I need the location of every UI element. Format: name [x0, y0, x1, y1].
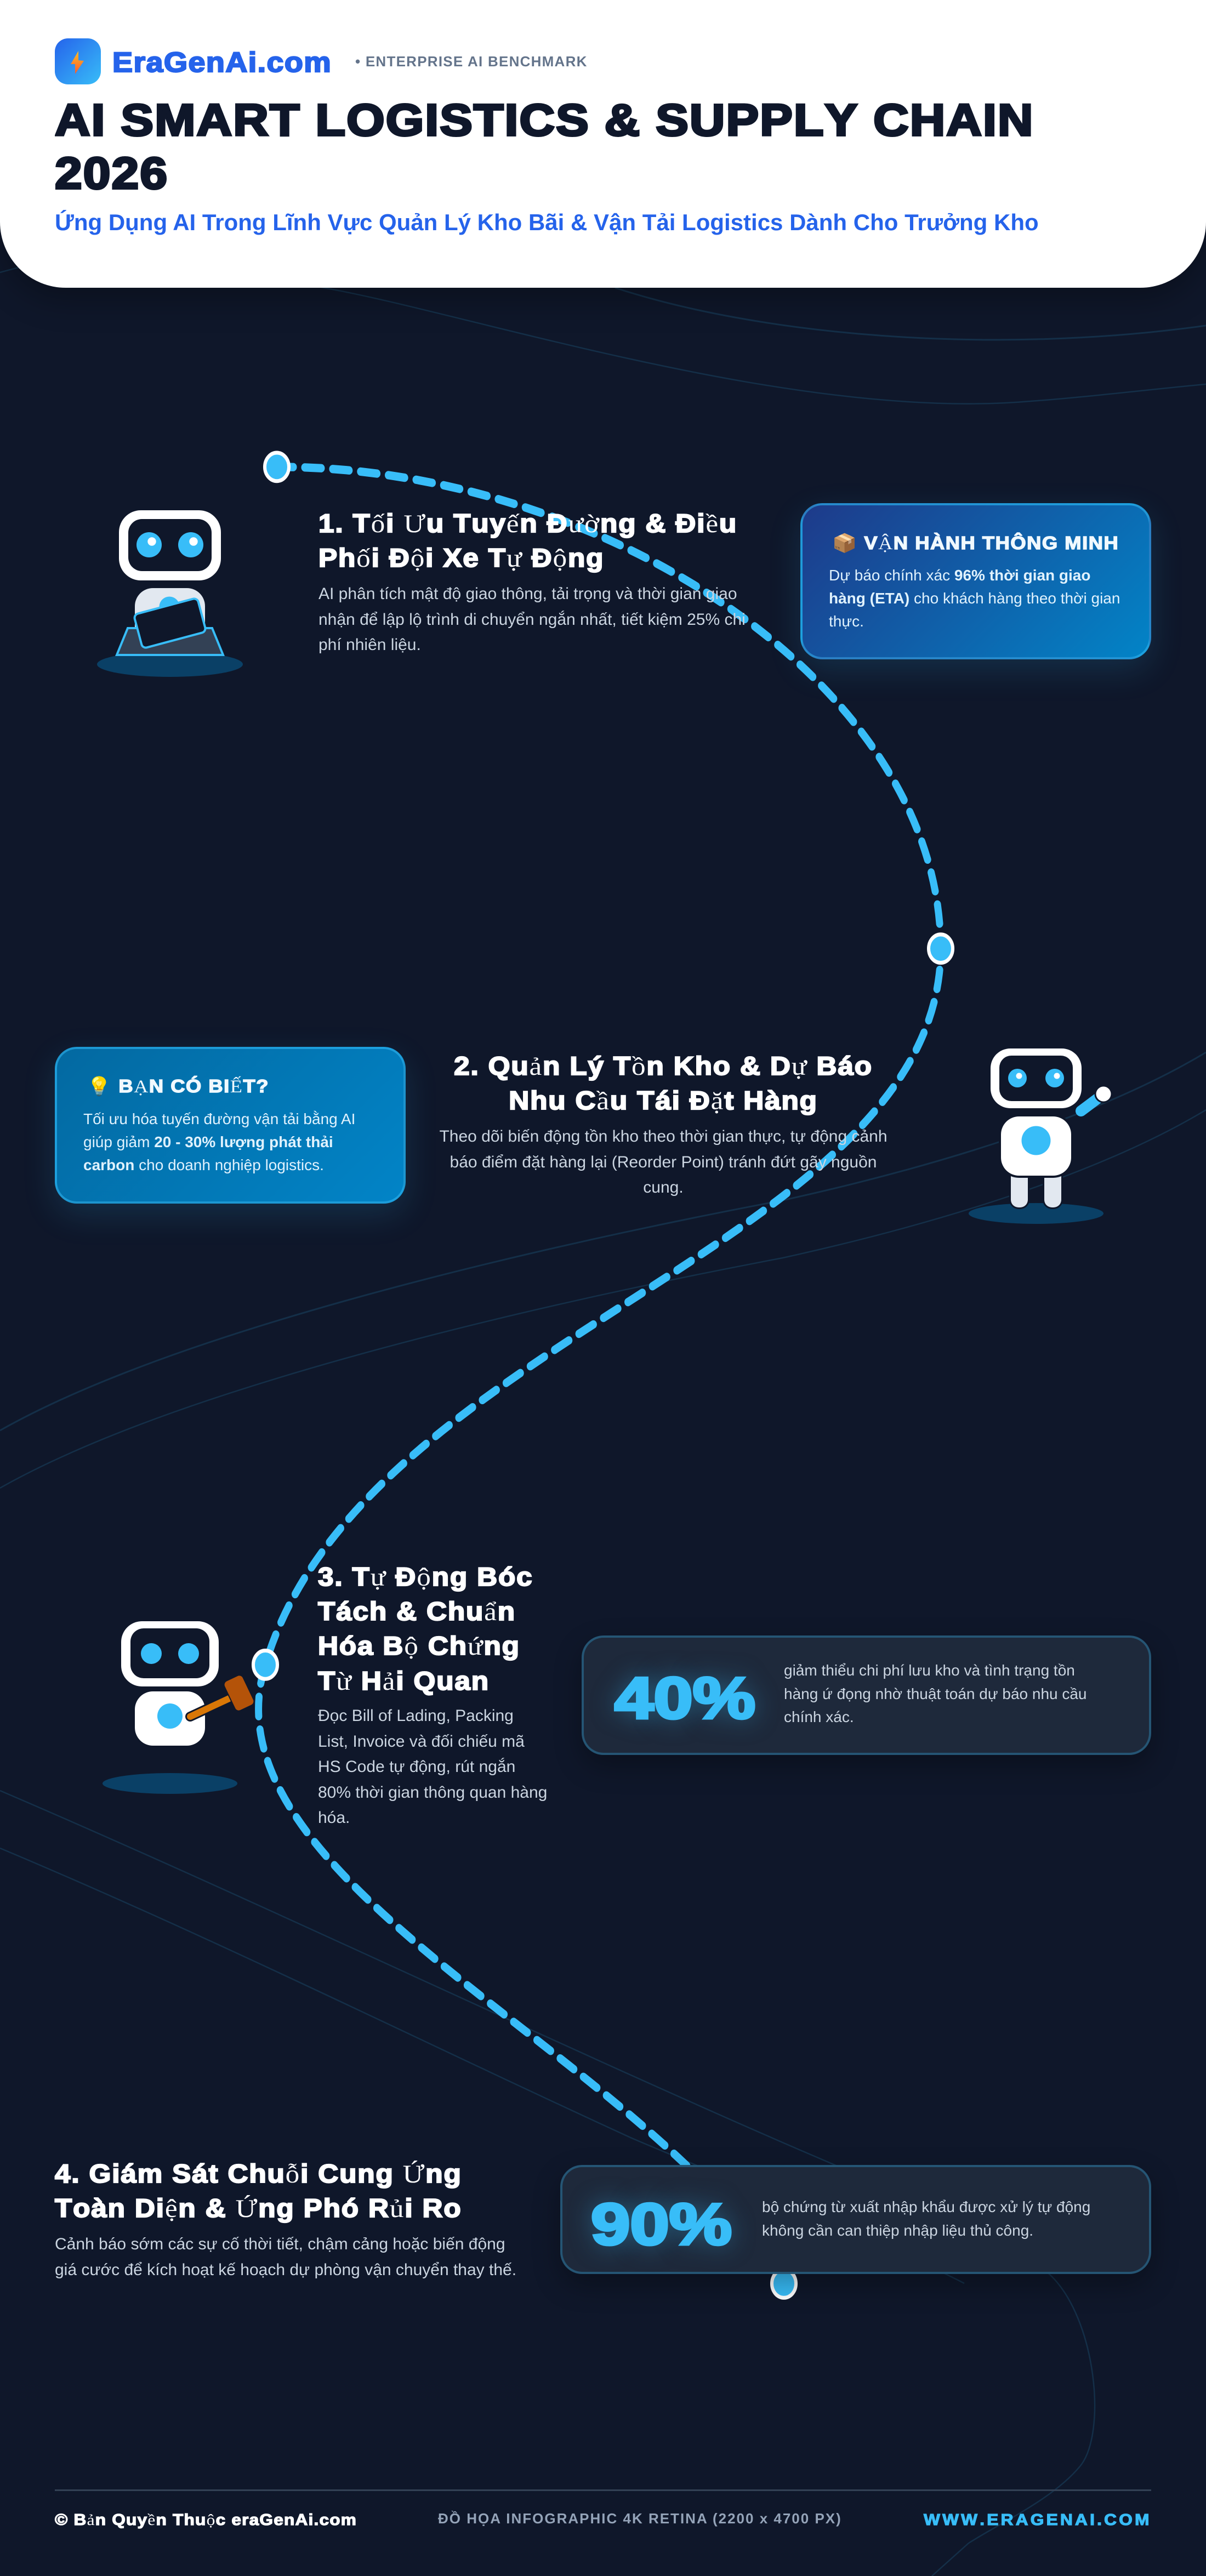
step 3 heading: Hóa Bộ Chứng — [318, 1631, 520, 1661]
step 3 text — [318, 1707, 547, 1827]
callout body: carbon cho doanh nghiệp logistics. — [83, 1156, 324, 1173]
callout body: Dự báo chính xác 96% thời gian giao — [829, 567, 1090, 584]
stat description: không cần can thiệp nhập liệu thủ công. — [762, 2222, 1033, 2238]
subtitle: Ứng Dụng AI Trong Lĩnh Vực Quản Lý Kho Bãi & Vận Tải Logistics Dành Cho Trưởng Kho — [55, 209, 1039, 235]
stat card: 90% — [560, 2165, 1151, 2274]
step 4 heading — [54, 2158, 462, 2223]
main title — [55, 95, 1034, 198]
step 1 text: phí nhiên liệu. — [318, 636, 421, 654]
step 3 text: Đọc Bill of Lading, Packing — [318, 1707, 514, 1725]
callout: smart operations — [800, 503, 1151, 659]
stat number: 90% — [591, 2191, 732, 2257]
callout body: Tối ưu hóa tuyến đường vận tải bằng AI — [83, 1110, 355, 1127]
robot 2: waving — [969, 1048, 1111, 1224]
step 1 heading — [318, 509, 737, 573]
main title: 2026 — [55, 149, 168, 198]
footer center note: ĐỒ HỌA INFOGRAPHIC 4K RETINA (2200 x 4700 PX) — [438, 2510, 842, 2527]
step 4 text — [55, 2235, 516, 2279]
step 1 heading: Phối Đội Xe Tự Động — [318, 543, 604, 573]
robot 3: with gavel — [103, 1621, 253, 1794]
step 2 heading: Nhu Cầu Tái Đặt Hàng — [509, 1086, 818, 1115]
step 2 heading: 2. Quản Lý Tồn Kho & Dự Báo — [454, 1051, 873, 1081]
stat description: giảm thiểu chi phí lưu kho và tình trạng tồn — [784, 1662, 1075, 1679]
callout body: thực. — [829, 613, 864, 630]
step 3 text: 80% thời gian thông quan hàng — [318, 1783, 547, 1801]
robot 1: with tablet — [97, 510, 243, 677]
callout body — [829, 567, 1120, 630]
step 4 text: Cảnh báo sớm các sự cố thời tiết, chậm cảng hoặc biến động — [55, 2235, 505, 2253]
step 2 text: báo điểm đặt hàng lại (Reorder Point) tránh đứt gãy nguồn — [450, 1153, 877, 1171]
header panel — [0, 0, 1206, 288]
stat description: bộ chứng từ xuất nhập khẩu được xử lý tự động — [762, 2198, 1090, 2215]
logo wordmark: EraGenAi.com — [112, 47, 332, 78]
footer url: WWW.ERAGENAI.COM — [924, 2511, 1152, 2529]
logo icon: lightning — [55, 38, 101, 84]
stat description — [784, 1662, 1087, 1725]
step 4 heading: 4. Giám Sát Chuỗi Cung Ứng — [55, 2158, 462, 2188]
stat description: chính xác. — [784, 1708, 854, 1725]
callout: did you know — [55, 1047, 406, 1204]
callout body: giúp giảm 20 - 30% lượng phát thải — [83, 1133, 333, 1150]
step 2 text: Theo dõi biến động tồn kho theo thời gian thực, tự động cảnh — [439, 1127, 888, 1145]
stat card: 40% — [582, 1635, 1151, 1755]
step 3 heading — [317, 1562, 533, 1696]
footer — [55, 2489, 1152, 2529]
step 3 text: HS Code tự động, rút ngắn — [318, 1758, 515, 1776]
stat description — [762, 2198, 1090, 2239]
callout heading: 💡 BẠN CÓ BIẾT? — [87, 1076, 269, 1097]
step 3 text: hóa. — [318, 1809, 350, 1827]
callout heading: 📦 VẬN HÀNH THÔNG MINH — [832, 533, 1119, 554]
callout body — [83, 1110, 355, 1173]
step 1 heading: 1. Tối Ưu Tuyến Đường & Điều — [318, 509, 737, 538]
step 4 heading: Toàn Diện & Ứng Phó Rủi Ro — [55, 2193, 462, 2223]
stat description: hàng ứ đọng nhờ thuật toán dự báo nhu cầu — [784, 1685, 1087, 1702]
step 3 heading: 3. Tự Động Bóc — [318, 1562, 533, 1592]
step 1 text: AI phân tích mật độ giao thông, tải trọng và thời gian giao — [318, 585, 737, 603]
footer copyright: © Bản Quyền Thuộc eraGenAi.com — [55, 2511, 357, 2529]
step 2 text — [439, 1127, 888, 1196]
step 3 heading: Tách & Chuẩn — [318, 1597, 516, 1626]
step 1 text — [318, 585, 746, 654]
step 3 text: List, Invoice và đối chiếu mã — [318, 1732, 525, 1751]
step 4 text: giá cước để kích hoạt kế hoạch dự phòng vận chuyển thay thế. — [55, 2260, 516, 2279]
main title: AI SMART LOGISTICS & SUPPLY CHAIN — [55, 95, 1034, 145]
stat number: 40% — [615, 1665, 755, 1731]
step 1 text: nhận để lập lộ trình di chuyển ngắn nhất, tiết kiệm 25% chi — [318, 611, 746, 628]
step 2 heading — [454, 1051, 873, 1116]
header tag: • ENTERPRISE AI BENCHMARK — [355, 53, 588, 70]
step 3 heading: Từ Hải Quan — [318, 1666, 490, 1696]
step 2 text: cung. — [643, 1178, 684, 1196]
callout body: hàng (ETA) cho khách hàng theo thời gian — [829, 590, 1120, 607]
